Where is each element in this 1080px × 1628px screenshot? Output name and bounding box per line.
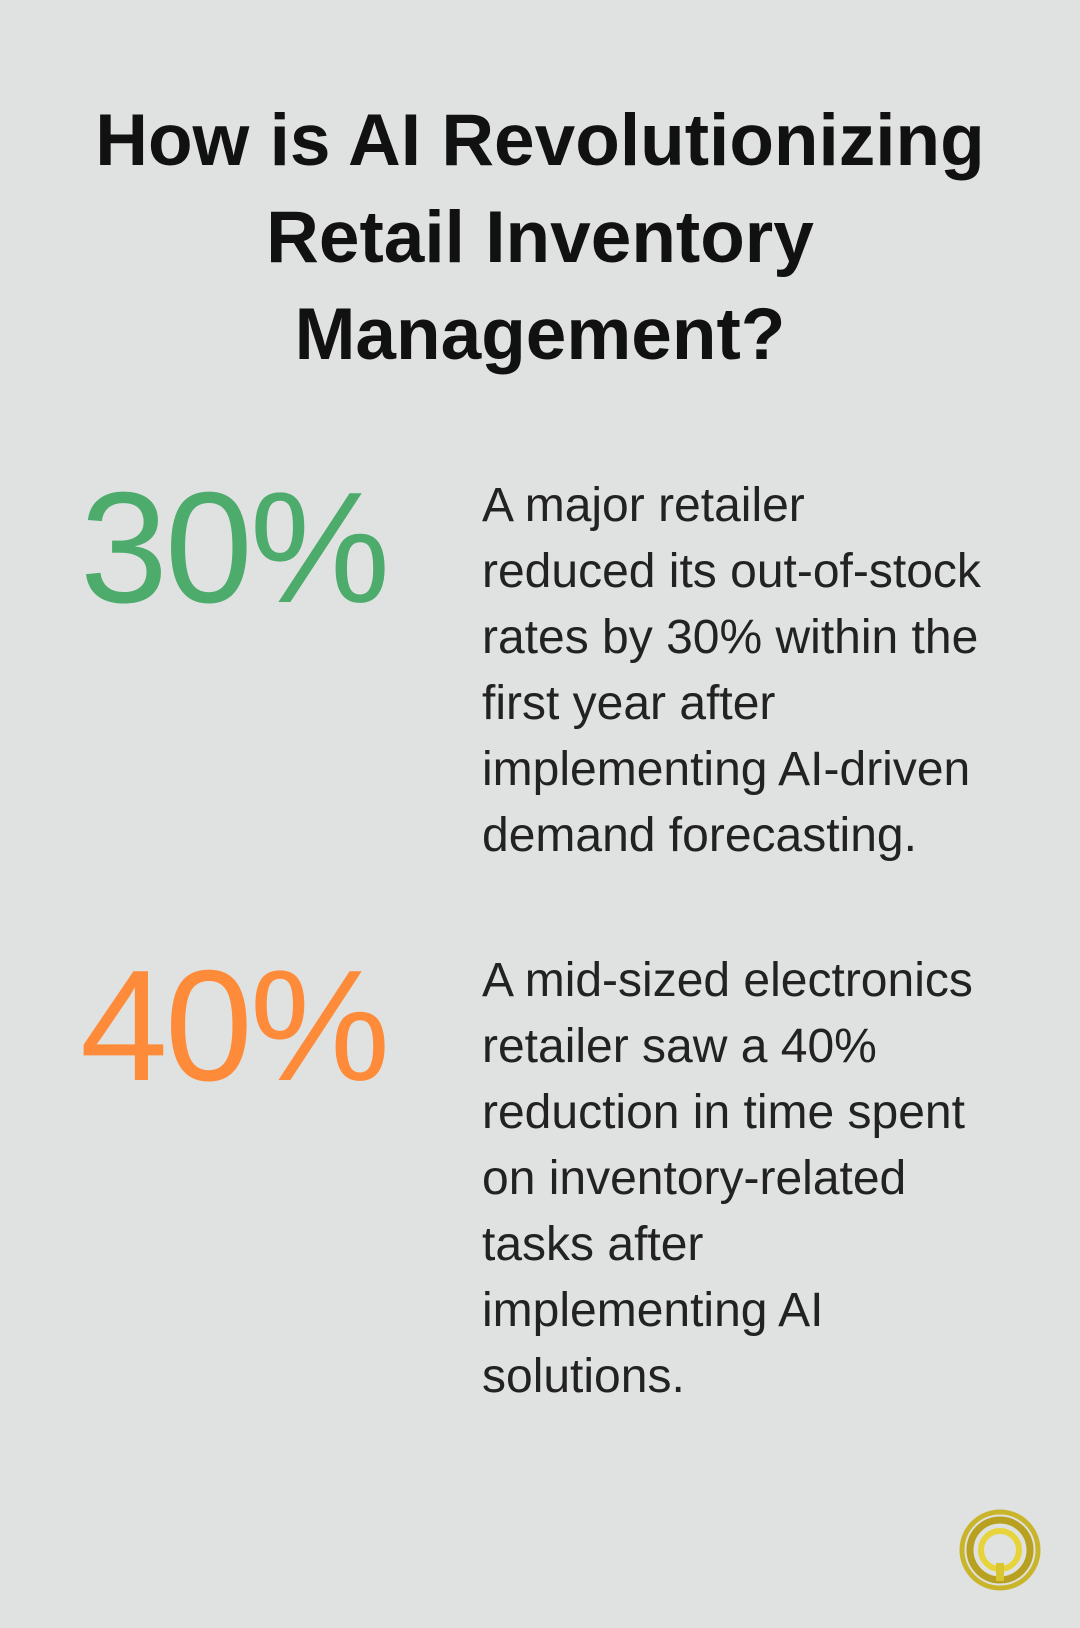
text: 30% description (482, 479, 981, 862)
text: 40% description: solutions. (482, 1350, 685, 1403)
text: 40% description: retailer saw a 40% (482, 1020, 877, 1073)
text: 30% description: implementing AI-driven (482, 743, 970, 796)
text: 40% description (482, 954, 973, 1403)
text: 30% description: first year after (482, 677, 775, 730)
title (95, 100, 985, 375)
text: 30% description: rates by 30% within the (482, 611, 978, 664)
text: 40% description: tasks after (482, 1218, 703, 1271)
text: 40% description: reduction in time spent (482, 1086, 965, 1139)
stat: 30%: 30% (80, 460, 387, 636)
text: 40% description: A mid-sized electronics (482, 954, 973, 1007)
title: Management? (295, 294, 785, 375)
text: 30% description: reduced its out-of-stock (482, 545, 981, 598)
stat: 40%: 40% (80, 938, 387, 1114)
text: 40% description: on inventory-related (482, 1152, 906, 1205)
text: 40% description: implementing AI (482, 1284, 824, 1337)
text: 30% description: A major retailer (482, 479, 805, 532)
title: How is AI Revolutionizing (95, 100, 985, 181)
icon: logo (960, 1510, 1040, 1590)
text: 30% description: demand forecasting. (482, 809, 917, 862)
title: Retail Inventory (266, 197, 814, 278)
